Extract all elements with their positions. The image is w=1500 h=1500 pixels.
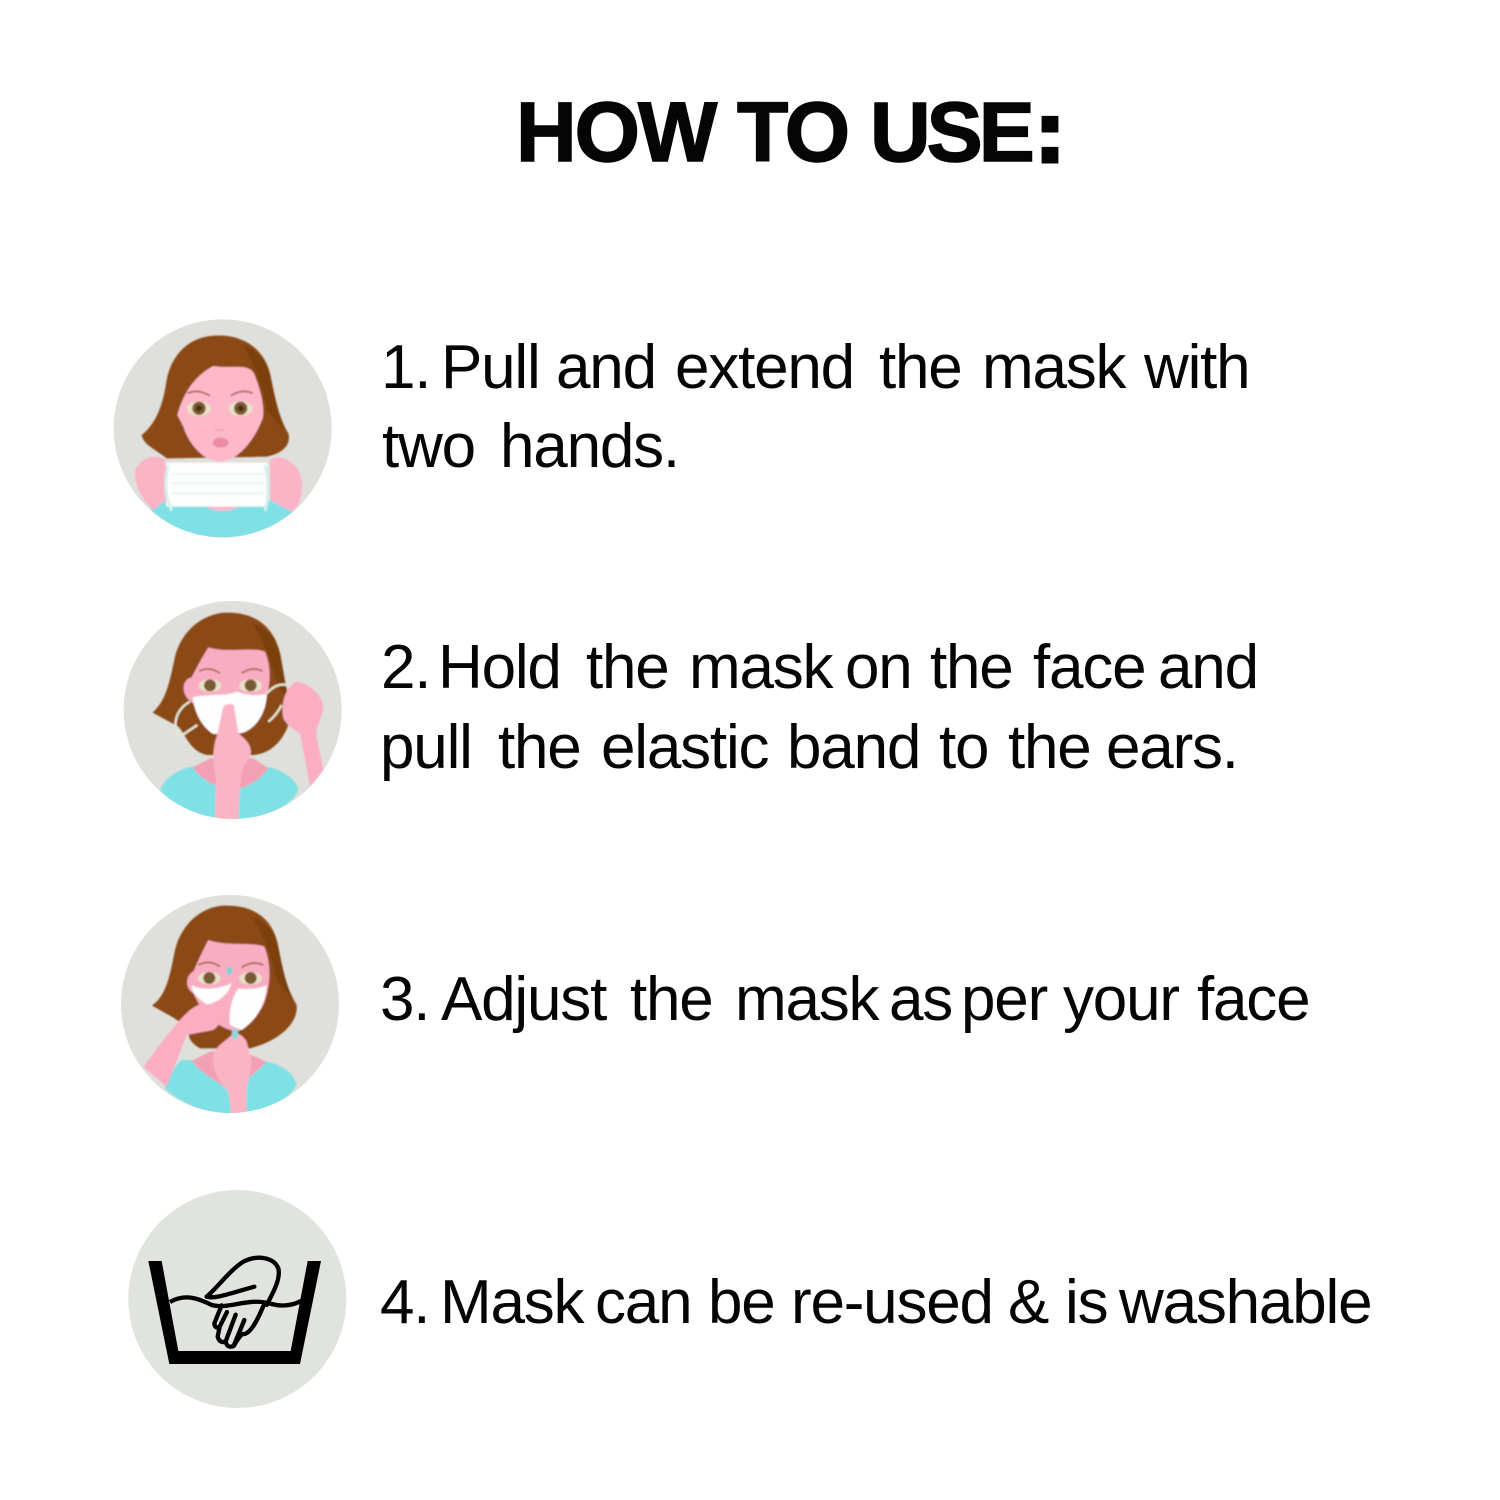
step 2 text: on (845, 633, 912, 702)
step 1 text (381, 333, 1249, 481)
step 2 text: the (586, 633, 669, 702)
step 2 text: mask (689, 633, 835, 702)
step 4 text: re-used (791, 1268, 993, 1337)
step 3 text: mask (735, 965, 881, 1034)
step 3 circle background (121, 895, 339, 1113)
step 2 illustration: woman holding mask on face (124, 601, 342, 822)
step 2 text: ears. (1106, 713, 1238, 782)
title: : (1036, 85, 1062, 179)
step 3 text: Adjust (441, 965, 607, 1034)
step 2 text: elastic (601, 713, 769, 782)
step 4 text: washable (1118, 1268, 1371, 1337)
step 4 text: 4. (380, 1268, 429, 1337)
hand outline (207, 1258, 279, 1347)
step 2 text: the (930, 633, 1013, 702)
step 2 text: and (1158, 633, 1258, 702)
step 1 illustration: woman stretching mask (114, 319, 332, 543)
step 2 circle background (124, 601, 342, 819)
step 1 figure (133, 336, 313, 543)
step 2 figure (153, 613, 323, 822)
step 3 text: as (889, 965, 952, 1034)
title: TO (737, 85, 848, 179)
step 4 text: Mask (440, 1268, 586, 1337)
step 1 text: hands. (500, 412, 679, 481)
step 1 text: extend (675, 333, 854, 402)
step 2 text (380, 633, 1258, 782)
step 3 text: per (961, 965, 1048, 1034)
step 3 text: the (630, 965, 713, 1034)
step 1 circle background (114, 319, 332, 537)
title: HOW (516, 85, 718, 179)
step 1 text: Pull (441, 333, 540, 402)
step 4 illustration: hand wash symbol (128, 1190, 346, 1408)
step 1 text: 1. (381, 333, 430, 402)
step 3 text: 3. (380, 965, 429, 1034)
wash basin (148, 1261, 321, 1364)
step 4 text: is (1065, 1268, 1107, 1337)
step 1 text: with (1143, 333, 1249, 402)
title: USE (870, 85, 1032, 179)
step 1 text: and (556, 333, 656, 402)
step 2 text: face (1033, 633, 1145, 702)
step 2 text: pull (380, 713, 472, 782)
step 1 text: the (879, 333, 962, 402)
step 2 text: band (787, 713, 920, 782)
step 4 text: & (1008, 1268, 1049, 1337)
water line (170, 1297, 302, 1306)
step 3 illustration: woman adjusting mask (121, 895, 339, 1115)
step 3 text: your (1063, 965, 1179, 1034)
step 2 text: Hold (438, 633, 561, 702)
step 2 text: to (939, 713, 988, 782)
step 2 text: the (498, 713, 581, 782)
step 1 text: two (382, 412, 475, 481)
step 1 text: mask (982, 333, 1128, 402)
step 4 text: be (708, 1268, 775, 1337)
step 4 circle background (128, 1190, 346, 1408)
step 4 text: can (595, 1268, 691, 1337)
step 2 text: 2. (381, 633, 430, 702)
step 2 text: the (1008, 713, 1091, 782)
step 3 text: face (1197, 965, 1309, 1034)
step 3 figure (143, 906, 297, 1115)
